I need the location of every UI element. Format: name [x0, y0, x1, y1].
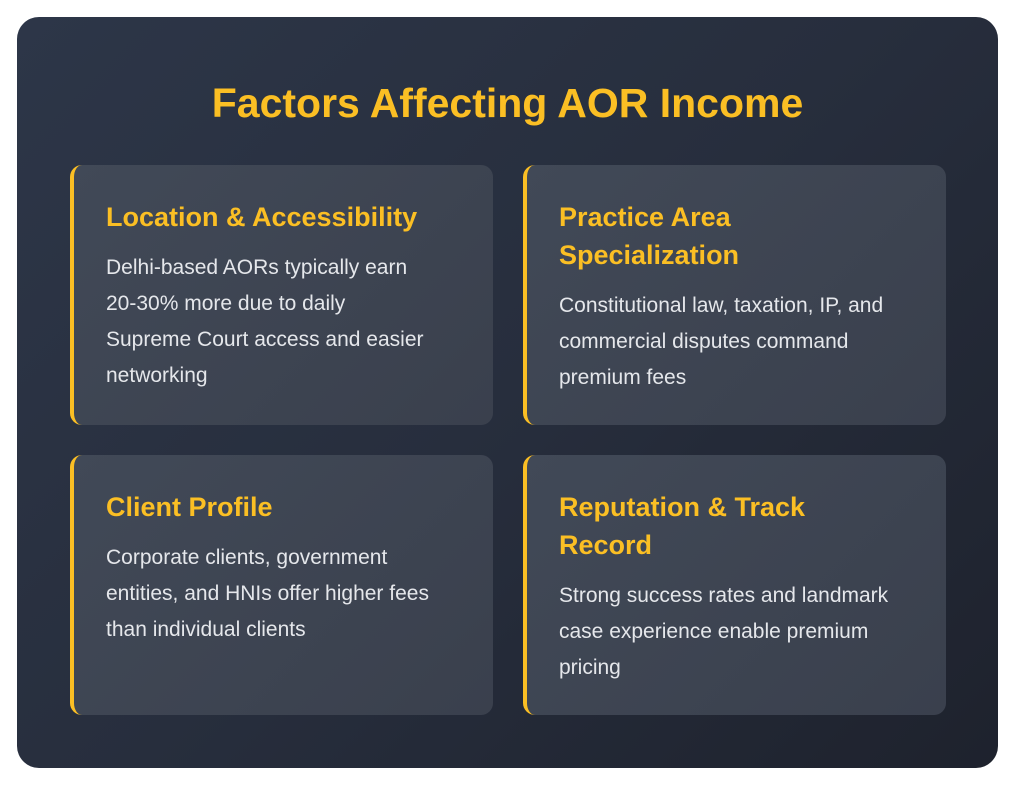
- card heading: [559, 202, 739, 270]
- card: client profile: [70, 455, 493, 715]
- title: Factors Affecting AOR Income: [212, 80, 803, 126]
- card: location: [70, 165, 493, 425]
- card text: Delhi-based AORs typically earn: [106, 256, 407, 279]
- card heading: Reputation & Track: [559, 492, 805, 522]
- card text: than individual clients: [106, 618, 306, 641]
- card text: pricing: [559, 656, 621, 679]
- card heading: Specialization: [559, 240, 739, 270]
- card heading: Client Profile: [106, 492, 273, 522]
- card: reputation: [523, 455, 946, 715]
- card text: Constitutional law, taxation, IP, and: [559, 294, 883, 317]
- card text: Strong success rates and landmark: [559, 584, 888, 607]
- card text: Corporate clients, government: [106, 546, 387, 569]
- card text: commercial disputes command: [559, 330, 848, 353]
- card heading: [559, 492, 805, 560]
- card text: networking: [106, 364, 208, 387]
- card text: [559, 584, 888, 679]
- card heading: Record: [559, 530, 652, 560]
- card text: Supreme Court access and easier: [106, 328, 424, 351]
- card text: entities, and HNIs offer higher fees: [106, 582, 429, 605]
- card heading: Practice Area: [559, 202, 731, 232]
- card text: 20-30% more due to daily: [106, 292, 345, 315]
- card text: [106, 546, 429, 641]
- card text: case experience enable premium: [559, 620, 868, 643]
- card text: premium fees: [559, 366, 686, 389]
- card text: [106, 256, 424, 387]
- card: practice area: [523, 165, 946, 425]
- card text: [559, 294, 883, 389]
- card heading: Location & Accessibility: [106, 202, 417, 232]
